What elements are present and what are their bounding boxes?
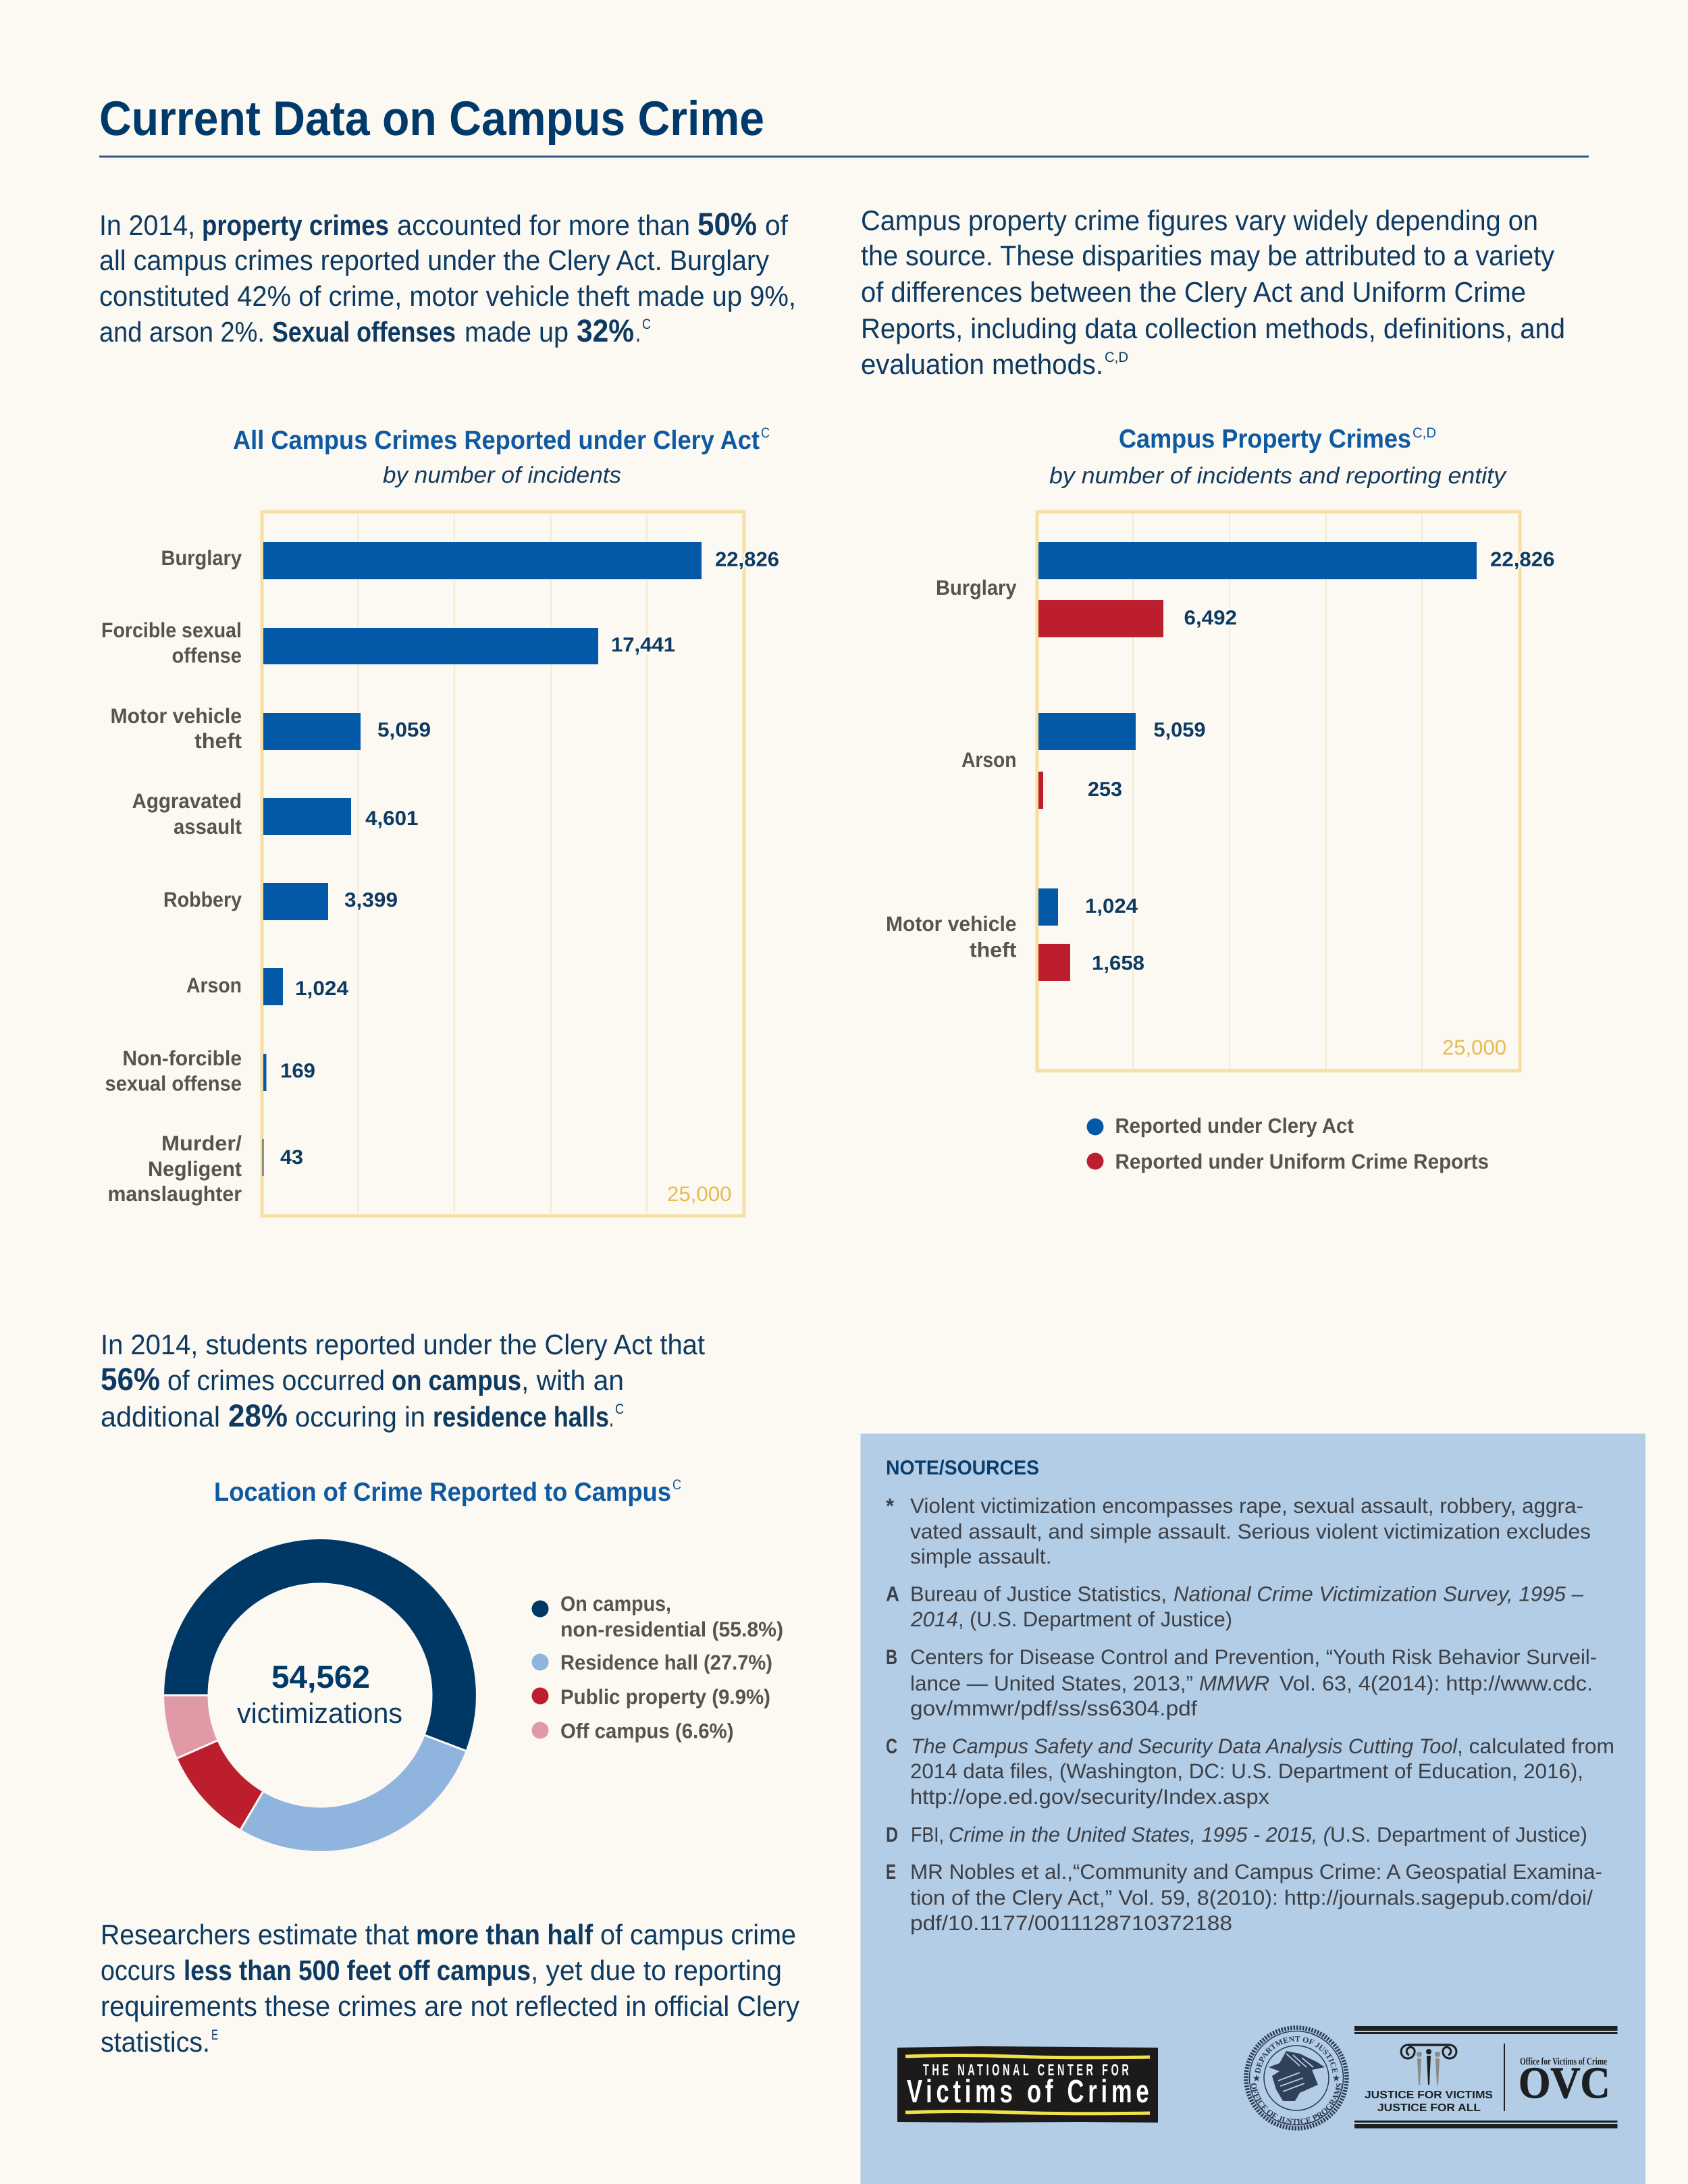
source B	[886, 1645, 1597, 1720]
category labels	[101, 546, 242, 1206]
text block: crime location summary: In 2014, students reported under the Clery Act that	[101, 1329, 705, 1360]
text block: off-campus crime: occurs	[101, 1954, 176, 1986]
panel: notes and sources	[860, 1434, 1645, 2184]
text block: off-campus crime: requirements these crimes are not reflected in official Clery	[101, 1990, 799, 2022]
text block: crime location summary: additional	[101, 1401, 220, 1433]
text block: off-campus crime: less than 500 feet off campus	[184, 1954, 531, 1986]
text block: off-campus crime: more than half	[416, 1919, 594, 1950]
logo: Office of Justice Programs seal: ★	[1332, 2074, 1340, 2084]
donut center total	[237, 1659, 402, 1729]
source E	[886, 1860, 1602, 1935]
legend: reporting entity	[1087, 1114, 1489, 1173]
title: Current Data on Campus Crime	[99, 92, 764, 146]
source B: lance — United States, 2013,”	[910, 1672, 1193, 1695]
text block: crime location summary: of crimes occurred	[167, 1364, 385, 1396]
legend: reporting entity: Reported under Clery Act	[1115, 1114, 1354, 1138]
legend: location of crime: Off campus (6.6%)	[560, 1719, 733, 1743]
text block: off-campus crime: E	[211, 2027, 218, 2043]
source C	[886, 1734, 1614, 1809]
source B: Centers for Disease Control and Prevention, “Youth Risk Behavior Surveil-	[910, 1645, 1597, 1669]
category labels: Burglary	[936, 576, 1017, 600]
source B: MMWR	[1199, 1672, 1269, 1695]
chart heading: location of crime: Location of Crime Reported to Campus	[214, 1478, 671, 1507]
category labels: Arson	[186, 974, 242, 997]
axis maximum: 25,000	[667, 1182, 732, 1206]
text block: crime location summary: on campus	[392, 1364, 521, 1396]
value labels: 169	[280, 1060, 315, 1082]
text block: crime location summary: , with an	[521, 1364, 624, 1396]
value labels: 3,399	[344, 889, 398, 911]
source A: A	[886, 1582, 899, 1605]
logo: Office of Justice Programs seal: OFFICE OF JUSTICE PROGRAMS	[1250, 2083, 1342, 2125]
bars	[262, 542, 702, 1176]
logo: Office of Justice Programs seal	[1244, 2025, 1349, 2131]
text block: property crimes share: all campus crimes reported under the Clery Act. Burglary	[99, 244, 769, 276]
source E: MR Nobles et al.,“Community and Campus Crime: A Geospatial Examina-	[910, 1860, 1602, 1884]
text block: property crime disparities	[861, 205, 1565, 380]
value labels	[280, 548, 779, 1169]
bar chart: campus property crimes	[886, 512, 1554, 1071]
source C: 2014 data files, (Washington, DC: U.S. Department of Education, 2016),	[910, 1759, 1583, 1783]
source B: Vol. 63, 4(2014): http://www.cdc.	[1280, 1672, 1593, 1695]
legend: location of crime: non-residential (55.8%)	[560, 1618, 783, 1641]
panel heading: NOTE/SOURCES	[886, 1457, 1039, 1479]
category labels: theft	[970, 938, 1017, 961]
text block: property crimes share: .	[635, 316, 641, 348]
logo: Office of Justice Programs seal: DEPARTMENT OF JUSTICE	[1255, 2036, 1338, 2074]
logo: OVC Justice for Victims: OVC	[1519, 2058, 1610, 2108]
category labels	[886, 576, 1017, 961]
logo: OVC Justice for Victims: Office for Victims of Crime	[1520, 2056, 1607, 2067]
value labels: 17,441	[611, 634, 675, 656]
value labels: 22,826	[1490, 548, 1554, 571]
text block: crime location summary: occuring in	[295, 1401, 425, 1433]
note: asterisk: Violent victimization encompasses rape, sexual assault, robbery, aggra-	[910, 1494, 1583, 1518]
source E: pdf/10.1177/0011128710372188	[910, 1911, 1232, 1935]
axis maximum: 25,000	[1442, 1036, 1506, 1059]
source D: D	[886, 1823, 898, 1846]
category labels: Robbery	[163, 888, 242, 911]
donut chart: location of crime	[163, 1539, 477, 1852]
category labels: Arson	[961, 748, 1017, 772]
text block: property crime disparities: Reports, including data collection methods, definitions, and	[861, 313, 1565, 344]
logo: National Center for Victims of Crime: THE NATIONAL CENTER FOR	[923, 2061, 1129, 2079]
note: asterisk: simple assault.	[910, 1545, 1052, 1568]
text block: property crimes share: 50%	[697, 206, 757, 242]
source E: tion of the Clery Act,” Vol. 59, 8(2010): http://journals.sagepub.com/doi/	[910, 1886, 1593, 1909]
value labels: 6,492	[1184, 607, 1237, 629]
text block: crime location summary: C	[615, 1402, 624, 1417]
value labels: 4,601	[365, 807, 419, 830]
text block: property crimes share	[99, 206, 796, 348]
source A: National Crime Victimization Survey, 1995 –	[1173, 1582, 1584, 1605]
bars: Clery Act	[1038, 542, 1477, 926]
text block: property crimes share: constituted 42% of crime, motor vehicle theft made up 9%,	[99, 280, 796, 312]
text block: property crime disparities: of differences between the Clery Act and Uniform Crime	[861, 276, 1526, 308]
text block: off-campus crime: Researchers estimate that	[101, 1919, 409, 1950]
text block: property crimes share: property crimes	[202, 209, 389, 241]
logo: National Center for Victims of Crime: Victims of Crime	[907, 2074, 1149, 2110]
donut center total: victimizations	[237, 1697, 402, 1729]
text block: property crime disparities: Campus property crime figures vary widely depending on	[861, 205, 1538, 236]
value labels	[1085, 548, 1554, 975]
chart heading: campus property crimes: C,D	[1413, 425, 1436, 441]
legend: location of crime: On campus,	[560, 1592, 671, 1616]
chart heading: all campus crimes	[233, 425, 770, 488]
note: asterisk	[886, 1494, 1591, 1568]
category labels: Aggravated	[132, 789, 242, 813]
category labels: manslaughter	[108, 1182, 242, 1206]
bar chart: all campus crimes	[101, 512, 779, 1216]
chart heading: all campus crimes: All Campus Crimes Reported under Clery Act	[233, 426, 760, 455]
category labels: Non-forcible	[123, 1046, 242, 1070]
source D: U.S. Department of Justice)	[1330, 1823, 1587, 1846]
category labels: Murder/	[161, 1131, 242, 1155]
source A	[886, 1582, 1584, 1631]
category labels: theft	[194, 729, 242, 753]
source E: E	[886, 1860, 896, 1884]
icon: column with three figures	[1401, 2045, 1456, 2085]
category labels: sexual offense	[105, 1072, 242, 1095]
chart heading: campus property crimes: by number of incidents and reporting entity	[1049, 463, 1507, 489]
note: asterisk: vated assault, and simple assault. Serious violent victimization excludes	[910, 1520, 1591, 1543]
category labels: Motor vehicle	[886, 912, 1017, 936]
value labels: 43	[280, 1146, 303, 1169]
source A: 2014	[910, 1607, 958, 1631]
text block: crime location summary: 56%	[101, 1361, 160, 1397]
source A: , (U.S. Department of Justice)	[958, 1607, 1232, 1631]
legend: location of crime: Public property (9.9%)	[560, 1685, 770, 1709]
text block: off-campus crime	[101, 1919, 799, 2058]
source B: B	[886, 1645, 897, 1669]
bars: Uniform Crime Reports	[1038, 600, 1163, 981]
legend: location of crime	[532, 1592, 783, 1743]
text block: property crimes share: Sexual offenses	[272, 316, 456, 348]
text block: property crimes share: and arson 2%.	[99, 316, 265, 348]
category labels: Motor vehicle	[111, 704, 242, 728]
value labels: 253	[1088, 778, 1122, 801]
source C: C	[886, 1734, 897, 1758]
text block: crime location summary	[101, 1329, 705, 1433]
chart heading: campus property crimes	[1049, 425, 1507, 489]
source C: , calculated from	[1457, 1734, 1614, 1758]
note: asterisk: *	[886, 1494, 895, 1518]
legend: reporting entity: Reported under Uniform Crime Reports	[1115, 1150, 1489, 1173]
text block: off-campus crime: statistics.	[101, 2026, 210, 2058]
text block: crime location summary: residence halls	[433, 1401, 609, 1433]
logo: Office of Justice Programs seal: ★	[1252, 2074, 1261, 2084]
text block: off-campus crime: , yet due to reporting	[531, 1954, 782, 1986]
chart heading: all campus crimes: by number of incidents	[383, 462, 621, 488]
text block: property crime disparities: evaluation methods.	[861, 348, 1103, 380]
source D: FBI,	[911, 1823, 944, 1846]
logo: National Center for Victims of Crime	[897, 2046, 1158, 2123]
source D	[886, 1823, 1587, 1846]
text block: property crimes share: accounted for more than	[397, 209, 690, 241]
donut center total: 54,562	[271, 1659, 370, 1695]
text block: property crimes share: of	[765, 209, 788, 241]
category labels: assault	[174, 815, 242, 838]
chart heading: all campus crimes: C	[761, 425, 770, 441]
value labels: 1,658	[1092, 952, 1144, 975]
source D: Crime in the United States, 1995 - 2015, (	[949, 1823, 1332, 1846]
text block: property crimes share: C	[642, 317, 651, 332]
source C: The Campus Safety and Security Data Analysis Cutting Tool	[911, 1734, 1458, 1758]
category labels: offense	[172, 644, 242, 667]
chart heading: campus property crimes: Campus Property Crimes	[1119, 425, 1411, 454]
text block: property crime disparities: C,D	[1105, 350, 1128, 365]
logo: OVC Justice for Victims	[1354, 2026, 1618, 2128]
text block: property crimes share: made up	[465, 316, 569, 348]
text block: off-campus crime: of campus crime	[600, 1919, 796, 1950]
chart heading: location of crime: C	[672, 1477, 681, 1493]
text block: property crimes share: In 2014,	[99, 209, 195, 241]
source C: http://ope.ed.gov/security/Index.aspx	[910, 1785, 1270, 1809]
value labels: 1,024	[295, 978, 348, 1000]
source A: Bureau of Justice Statistics,	[910, 1582, 1167, 1605]
text block: property crime disparities: the source. These disparities may be attributed to a variety	[861, 240, 1554, 271]
category labels: Negligent	[148, 1157, 242, 1181]
category labels: Burglary	[161, 546, 242, 570]
logo: OVC Justice for Victims: JUSTICE FOR ALL	[1377, 2102, 1481, 2114]
text block: property crimes share: 32%	[577, 313, 634, 348]
category labels: Forcible sexual	[101, 618, 242, 642]
value labels: 1,024	[1085, 895, 1138, 917]
value labels: 22,826	[715, 548, 779, 571]
logo: OVC Justice for Victims: JUSTICE FOR VICTIMS	[1365, 2089, 1493, 2101]
value labels: 5,059	[1153, 719, 1206, 741]
value labels: 5,059	[377, 719, 431, 741]
text block: crime location summary: .	[609, 1401, 614, 1433]
source B: gov/mmwr/pdf/ss/ss6304.pdf	[910, 1697, 1197, 1720]
legend: location of crime: Residence hall (27.7%)	[560, 1651, 772, 1674]
text block: crime location summary: 28%	[228, 1397, 288, 1433]
